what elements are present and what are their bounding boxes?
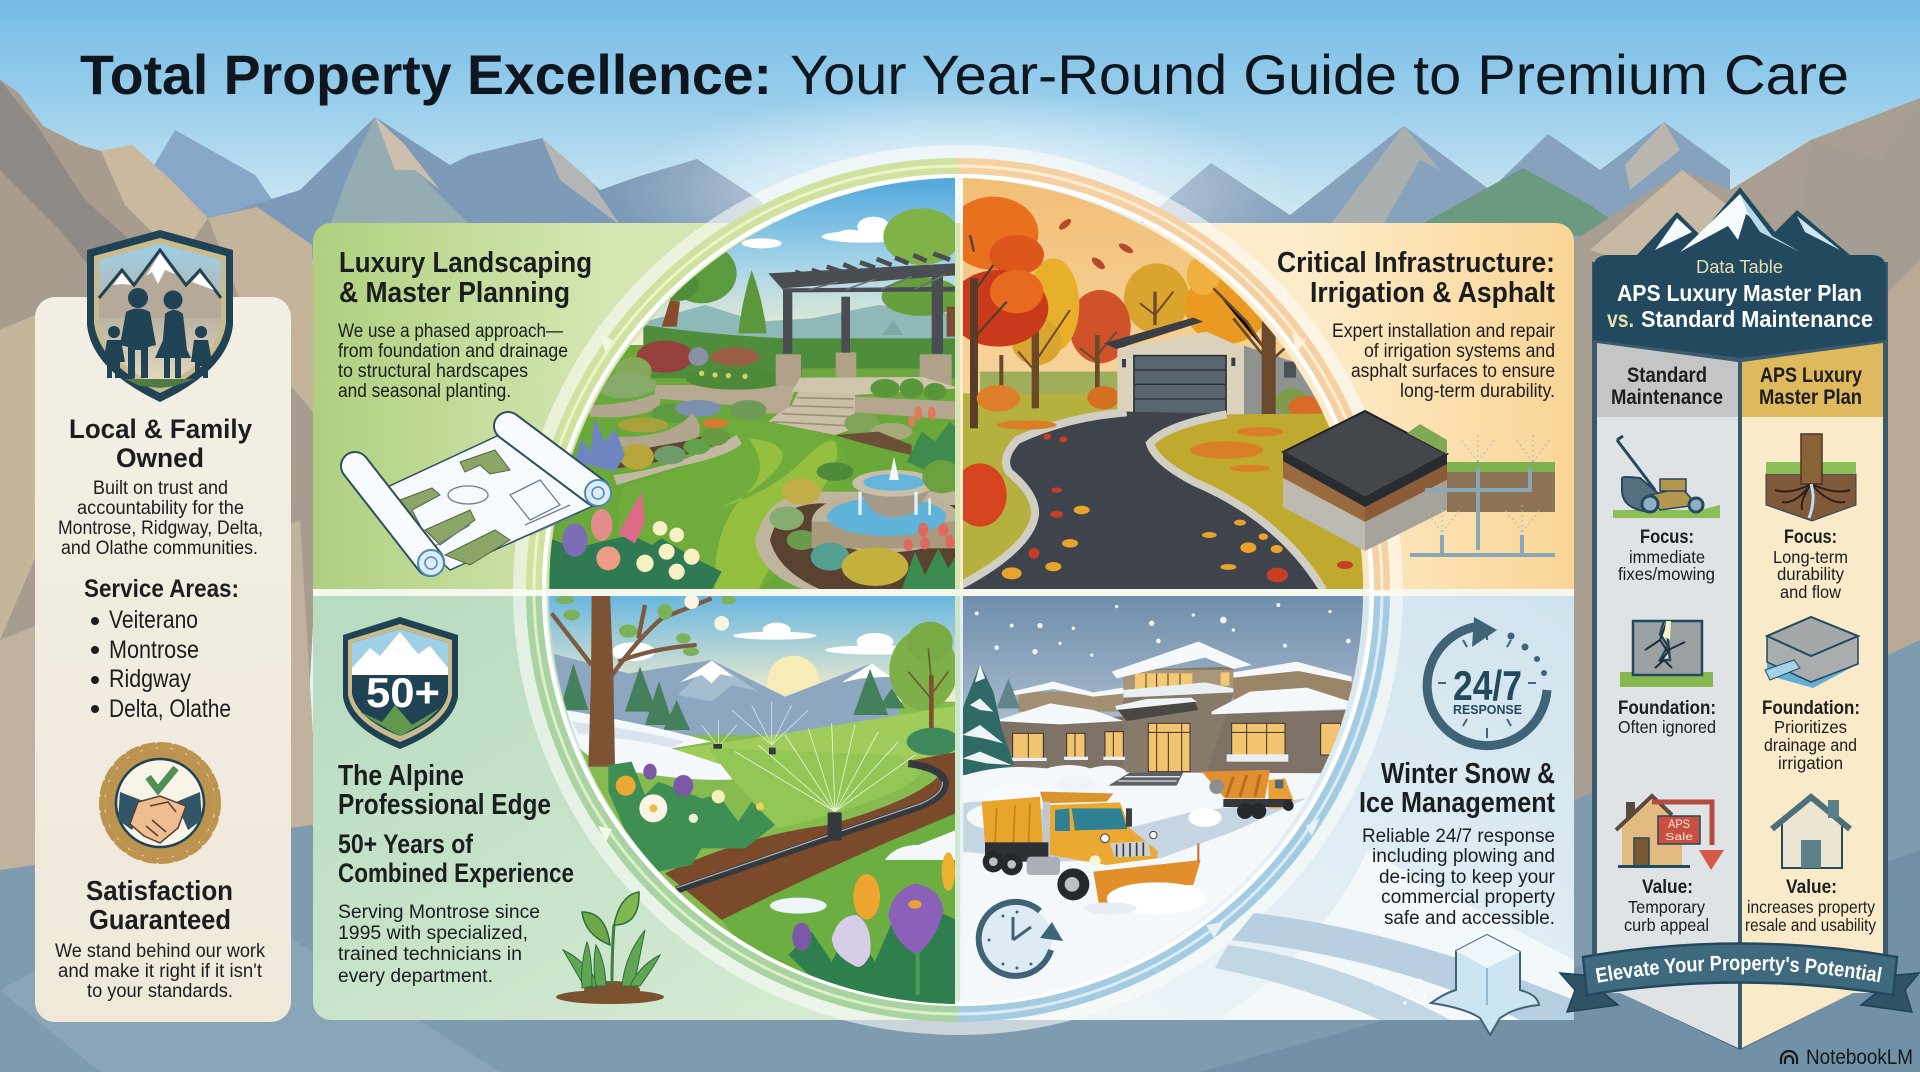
heading: alpine professional edge (338, 760, 551, 821)
heading: satisfaction guaranteed (86, 875, 233, 935)
service areas list: Delta, Olathe (109, 695, 231, 723)
panel: local and family owned (35, 230, 291, 1022)
heading: local and family owned: Owned (116, 443, 204, 473)
text: focus standard: immediate (1629, 547, 1705, 567)
text: focus luxury: and flow (1780, 582, 1841, 602)
text: focus luxury: durability (1777, 564, 1844, 584)
text: value standard: curb appeal (1624, 915, 1709, 935)
text: alpine description: Serving Montrose since (338, 902, 540, 923)
text: winter description: Reliable 24/7 response (1362, 826, 1555, 847)
subheading: 50+ years experience (338, 829, 574, 888)
icon: winter analog clock (979, 902, 1063, 976)
text: foundation luxury: Prioritizes (1774, 717, 1847, 737)
column: standard maintenance body (1597, 417, 1738, 1048)
photo scene: summer landscaped garden (545, 175, 962, 590)
text: local and family description: Built on trust and (93, 478, 228, 499)
table header with mountain peaks: APS Luxury Master Plan (1617, 280, 1862, 306)
heading: winter snow and ice: Ice Management (1359, 787, 1555, 819)
table header with mountain peaks: vs. (1607, 306, 1634, 332)
text: foundation standard: Foundation: (1618, 698, 1716, 719)
heading: winter snow and ice: Winter Snow & (1381, 758, 1555, 790)
text: winter description: de-icing to keep your (1379, 867, 1556, 888)
heading: critical infrastructure: Critical Infrastructure: (1277, 247, 1555, 279)
heading: critical infrastructure: Irrigation & Asphalt (1310, 277, 1555, 309)
title (80, 43, 1849, 106)
icon: cracked foundation (1620, 621, 1713, 687)
column header: APS luxury (1742, 343, 1883, 417)
text: winter description: commercial property (1381, 887, 1556, 908)
heading: alpine professional edge: The Alpine (338, 760, 464, 792)
text: landscaping description: We use a phased approach— (338, 321, 563, 342)
text: foundation luxury: Foundation: (1762, 698, 1860, 719)
text: foundation luxury: drainage and (1764, 735, 1857, 755)
text: value luxury: resale and usability (1745, 915, 1876, 935)
text: focus luxury: Long-term (1773, 547, 1848, 567)
table header with mountain peaks: Data Table (1696, 257, 1783, 277)
ring direction arrows (598, 334, 1320, 938)
text: local and family description: and Olathe communities. (61, 538, 258, 559)
text: infrastructure description: asphalt surfaces to ensure (1351, 361, 1555, 382)
icon: melting ice cube (1403, 935, 1539, 1035)
text: value luxury: increases property (1747, 897, 1875, 917)
text: satisfaction description (55, 941, 265, 1002)
column header: standard maintenance: Standard (1627, 364, 1707, 387)
text: alpine description (338, 902, 540, 987)
banner: elevate your property's potential: Elevate Your Property's Potential (1596, 956, 1882, 983)
icon: 50+ years shield (343, 617, 458, 749)
icon: tree roots (1766, 434, 1856, 521)
column: APS luxury body (1742, 417, 1883, 1048)
icon: 24/7 response clock (1427, 617, 1547, 746)
text: satisfaction description: We stand behind our work (55, 941, 265, 962)
panel: comparison table (1592, 187, 1888, 1050)
text: infrastructure description: of irrigation systems and (1364, 341, 1555, 362)
text: focus standard: fixes/mowing (1618, 564, 1715, 584)
title: Your Year-Round Guide to Premium Care (790, 43, 1849, 106)
icon: house with rising value (1772, 797, 1850, 868)
text: alpine description: trained technicians in (338, 944, 522, 965)
table header with mountain peaks: Standard Maintenance (1641, 306, 1873, 332)
panel backgrounds: four service quadrants (313, 223, 1574, 1020)
heading: local and family owned (69, 414, 252, 473)
text: foundation standard: Often ignored (1618, 717, 1716, 737)
service areas list: Montrose (109, 636, 199, 664)
photo scene: autumn driveway and garage (948, 175, 1375, 593)
text: value luxury (1745, 877, 1876, 935)
text: foundation standard (1618, 698, 1716, 737)
heading: luxury landscaping: & Master Planning (339, 277, 570, 309)
subheading: 50+ years experience: 50+ Years of (338, 829, 474, 859)
column header: standard maintenance (1597, 343, 1738, 417)
icon: 24/7 response clock: RESPONSE (1453, 702, 1522, 717)
heading: winter snow and ice (1359, 758, 1555, 819)
heading: satisfaction guaranteed: Satisfaction (86, 875, 233, 906)
photo scene: winter snow plowing (960, 595, 1375, 1012)
icon: 50+ years shield: 50+ (366, 669, 440, 716)
text: focus standard (1618, 527, 1715, 584)
text: landscaping description: and seasonal planting. (338, 381, 511, 402)
subheading: 50+ years experience: Combined Experience (338, 858, 574, 888)
heading: local and family owned: Local & Family (69, 414, 252, 444)
text: foundation luxury: irrigation (1778, 753, 1843, 773)
heading: critical infrastructure (1277, 247, 1555, 309)
text: landscaping description: from foundation and drainage (338, 341, 568, 362)
text: foundation luxury (1762, 698, 1860, 773)
text: infrastructure description: long-term durability. (1400, 381, 1555, 402)
text: winter description: safe and accessible. (1384, 908, 1555, 929)
text: value standard: Value: (1642, 877, 1693, 898)
text: landscaping description: to structural hardscapes (338, 361, 528, 382)
text: winter description (1362, 826, 1556, 929)
service areas list: Ridgway (109, 665, 191, 693)
column header: standard maintenance: Maintenance (1611, 386, 1723, 409)
banner: elevate your property's potential (1558, 942, 1920, 1013)
service areas list (84, 575, 239, 723)
title: Total Property Excellence: (80, 43, 772, 106)
service areas list: Veiterano (109, 606, 198, 634)
heading: luxury landscaping (339, 247, 592, 309)
text: focus luxury: Focus: (1784, 527, 1837, 548)
text: value standard: Temporary (1628, 897, 1705, 917)
text: satisfaction description: and make it right if it isn't (58, 961, 263, 982)
icon: rolled landscape blueprint (355, 426, 611, 576)
icon: asphalt cross section and irrigation (1283, 411, 1555, 555)
snowy foreground and skid tracks (1215, 850, 1574, 1020)
text: focus standard: Focus: (1640, 527, 1694, 548)
text: local and family description: accountability for the (77, 498, 244, 519)
text: local and family description: Montrose, Ridgway, Delta, (58, 518, 263, 539)
text: focus luxury (1773, 527, 1848, 602)
circular ring of seasons (530, 162, 1386, 1018)
icon: house with falling value: Sale (1665, 832, 1694, 843)
text: infrastructure description (1332, 321, 1556, 402)
icon: family shield (87, 230, 233, 402)
table header with mountain peaks (1593, 187, 1886, 358)
service areas list: Service Areas: (84, 575, 239, 603)
heading: alpine professional edge: Professional Edge (338, 789, 551, 821)
column header: APS luxury: APS Luxury (1760, 364, 1862, 387)
icon: house with falling value (1616, 796, 1724, 870)
heading: satisfaction guaranteed: Guaranteed (89, 904, 231, 935)
text: alpine description: 1995 with specialized, (338, 923, 528, 944)
text: landscaping description (338, 321, 568, 402)
icon: 24/7 response clock: 24/7 (1453, 662, 1522, 709)
text: local and family description (58, 478, 263, 559)
text: winter description: including plowing and (1372, 846, 1555, 867)
icon: house with falling value: APS (1668, 817, 1690, 831)
heading: luxury landscaping: Luxury Landscaping (339, 247, 592, 279)
text: value standard (1624, 877, 1709, 935)
icon: satisfaction seal handshake (102, 745, 218, 861)
icon: seedling (556, 892, 664, 1004)
photo scene: spring irrigation meadow (545, 594, 960, 1012)
text: infrastructure description: Expert installation and repair (1332, 321, 1556, 342)
column header: APS luxury: Master Plan (1759, 386, 1862, 409)
icon: lawn mower (1613, 436, 1720, 518)
text: satisfaction description: to your standards. (87, 981, 233, 1002)
text: alpine description: every department. (338, 966, 493, 987)
icon: foundation with drainage (1765, 617, 1858, 688)
text: value luxury: Value: (1786, 877, 1837, 898)
